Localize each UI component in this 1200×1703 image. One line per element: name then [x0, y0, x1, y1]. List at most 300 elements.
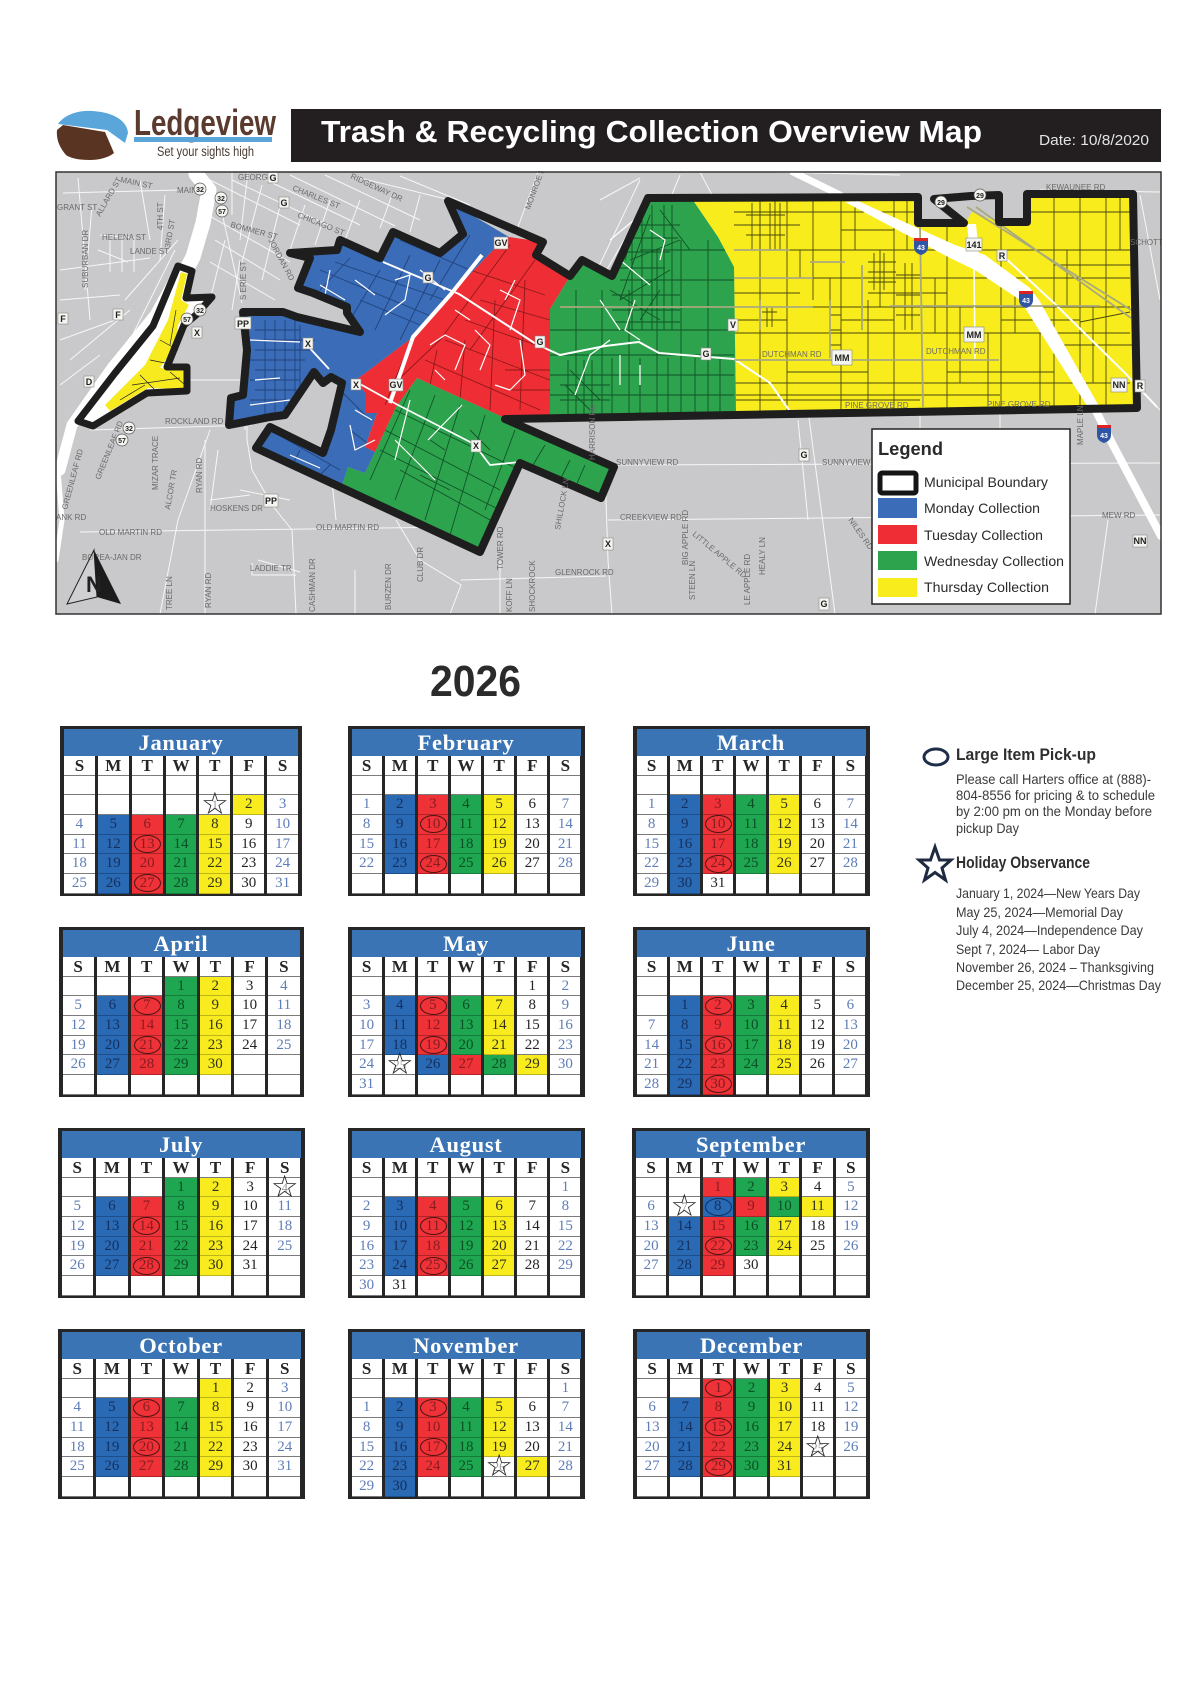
month heading: November	[413, 1333, 519, 1358]
road markers: 57	[118, 438, 126, 445]
day grid: 18	[743, 836, 758, 852]
month heading: December	[700, 1333, 803, 1358]
day grid: 13	[139, 1419, 154, 1435]
day grid: 21	[677, 1238, 692, 1254]
day grid: 2	[212, 978, 219, 994]
legend: Monday: Monday Collection	[924, 500, 1040, 516]
day grid: M	[392, 756, 408, 775]
day grid: 9	[714, 1017, 722, 1033]
day grid: 20	[645, 1439, 660, 1455]
day grid: 10	[743, 1017, 758, 1033]
day grid: 23	[743, 1238, 758, 1254]
day grid: 18	[777, 1037, 792, 1053]
text: holiday list: July 4, 2024—Independence Day	[956, 922, 1143, 938]
day grid: 25	[777, 1056, 792, 1072]
day grid: 19	[843, 1218, 858, 1234]
day grid: 7	[143, 997, 150, 1013]
logo mark: blue sky and brown hill	[57, 111, 128, 160]
day grid: T	[210, 957, 221, 976]
day grid: 28	[677, 1257, 692, 1273]
day grid: 14	[139, 1218, 154, 1234]
day grid: 15	[644, 836, 659, 852]
heading: large item pick-up: Large Item Pick-up	[956, 745, 1096, 764]
day grid: 8	[681, 1017, 688, 1033]
day grid: T	[712, 957, 724, 976]
day grid: 24	[392, 1257, 407, 1273]
day grid: 14	[678, 1419, 693, 1435]
month heading	[352, 930, 580, 957]
day grid: 31	[275, 875, 290, 891]
day grid: 30	[392, 1478, 407, 1494]
heading: holiday observance: Holiday Observance	[956, 854, 1090, 872]
day grid: 20	[810, 836, 825, 852]
day grid: 26	[843, 1238, 858, 1254]
road markers: 43	[1022, 298, 1030, 305]
day grid: 5	[108, 1399, 116, 1415]
day grid: 5	[429, 997, 437, 1013]
day grid: 20	[105, 1037, 120, 1053]
day grid: T	[210, 1359, 221, 1378]
day grid: 1	[212, 1380, 219, 1396]
road markers: 29	[937, 200, 945, 207]
road markers: R	[999, 251, 1006, 261]
day grid: 25	[276, 1037, 291, 1053]
day grid: 22	[644, 855, 659, 871]
day grid: 30	[677, 875, 692, 891]
day grid: 17	[425, 1439, 440, 1455]
road labels: HELENA ST	[102, 233, 146, 242]
road markers: 43	[1100, 433, 1108, 440]
day grid: T	[712, 1158, 723, 1177]
day grid: S	[280, 1359, 289, 1378]
day grid: 9	[396, 816, 403, 832]
text: holiday list: Sept 7, 2024— Labor Day	[956, 941, 1100, 957]
day grid: 24	[743, 1056, 758, 1072]
day grid: 6	[495, 1198, 503, 1214]
day grid: 24	[425, 1458, 440, 1474]
day grid: 20	[104, 1238, 119, 1254]
day grid: 11	[426, 1218, 440, 1234]
text: pick-up instructions	[956, 771, 1155, 836]
day grid: 5	[495, 1399, 503, 1415]
day grid: 25	[425, 1257, 440, 1273]
legend: municipal boundary: Municipal Boundary	[924, 474, 1048, 490]
day grid: 9	[246, 1399, 254, 1415]
day grid: 26	[493, 1459, 506, 1474]
day grid: W	[172, 957, 189, 976]
text: pick-up instructions: by 2:00 pm on the Monday before	[956, 803, 1152, 819]
road labels: CASHMAN DR	[308, 558, 317, 612]
road markers: D	[86, 377, 93, 387]
road labels: OLD MARTIN RD	[316, 523, 379, 532]
road markers: NN	[1112, 380, 1126, 390]
day grid: 30	[208, 1257, 223, 1273]
day grid: 14	[677, 1218, 692, 1234]
day grid: 10	[392, 1218, 407, 1234]
day grid: 25	[72, 875, 87, 891]
roads across zones	[845, 201, 1100, 409]
day grid: 31	[277, 1458, 292, 1474]
road markers: X	[305, 339, 311, 349]
month heading	[352, 1332, 580, 1359]
calendar: September	[632, 1128, 870, 1298]
day grid: 18	[72, 855, 87, 871]
day grid: 13	[843, 1017, 858, 1033]
road labels: LE APPLE RD	[743, 554, 752, 605]
road markers: X	[353, 380, 359, 390]
road labels: SUBURBAN DR	[81, 230, 90, 288]
road labels: PINE GROVE RD	[987, 400, 1051, 409]
day grid: T	[141, 957, 152, 976]
day grid: 29	[207, 875, 222, 891]
road markers: 57	[183, 317, 191, 324]
day grid: T	[713, 1359, 724, 1378]
icon: holiday star	[919, 847, 951, 880]
road labels: GLENROCK RD	[555, 568, 614, 577]
day grid: 17	[275, 836, 290, 852]
day grid: 9	[212, 997, 219, 1013]
day grid: 2	[562, 978, 569, 994]
day grid: S	[362, 957, 371, 976]
day grid: 21	[644, 1056, 659, 1072]
road markers: 32	[196, 187, 204, 194]
road labels: BIG APPLE RD	[681, 510, 690, 565]
day grid: M	[105, 756, 121, 775]
month heading: May	[443, 931, 489, 956]
day grid: S	[73, 1359, 82, 1378]
day grid: F	[527, 1359, 537, 1378]
day grid: 16	[359, 1238, 374, 1254]
day grid: 26	[843, 1439, 858, 1455]
calendar: March	[632, 726, 870, 896]
day grid: 3	[279, 796, 286, 812]
month heading	[352, 1131, 580, 1158]
day grid: T	[210, 1158, 221, 1177]
day grid: 27	[645, 1458, 660, 1474]
road markers: X	[194, 328, 200, 338]
day grid: 22	[677, 1056, 692, 1072]
day grid: 3	[429, 796, 437, 812]
road markers: PP	[237, 319, 249, 329]
road labels: MEW RD	[1102, 511, 1136, 520]
day grid: 11	[392, 1017, 407, 1033]
day grid: 10	[242, 997, 257, 1013]
day grid: 21	[843, 836, 858, 852]
month heading	[636, 930, 866, 957]
day grid: F	[812, 756, 822, 775]
day grid: 9	[562, 997, 569, 1013]
day grid: S	[362, 1359, 371, 1378]
day grid: M	[392, 957, 408, 976]
road labels: MAPLE LN	[1076, 405, 1085, 445]
road markers: G	[800, 450, 808, 460]
day grid: 28	[558, 855, 573, 871]
day grid: 6	[529, 1399, 536, 1415]
day grid: 12	[104, 1419, 119, 1435]
day grid: 30	[359, 1277, 374, 1293]
road labels: 3RD ST	[163, 219, 177, 248]
day grid: S	[280, 1158, 289, 1177]
day grid: 29	[677, 1076, 692, 1092]
day grid: W	[172, 1158, 189, 1177]
day grid: 14	[558, 1419, 573, 1435]
road labels: BURZEN DR	[384, 563, 393, 610]
day grid: 28	[173, 1458, 188, 1474]
day grid: 12	[425, 1017, 440, 1033]
day grid: 17	[359, 1037, 374, 1053]
road markers: G	[536, 337, 544, 347]
road markers: V	[730, 320, 736, 330]
day grid: 24	[425, 855, 440, 871]
day grid: 17	[243, 1218, 258, 1234]
day grid: 30	[241, 875, 256, 891]
day grid: 5	[74, 1198, 81, 1214]
day grid: F	[527, 957, 537, 976]
text: pick-up instructions: pickup Day	[956, 820, 1019, 836]
road labels: ALLARD ST	[94, 176, 124, 218]
day grid: 9	[363, 1218, 370, 1234]
day grid: 23	[208, 1238, 223, 1254]
day grid: 22	[208, 1439, 223, 1455]
day grid: 1	[714, 1179, 721, 1195]
title: Trash & Recycling Collection Overview Map	[321, 114, 982, 149]
day grid: 16	[208, 1218, 223, 1234]
road labels: MAIN ST	[120, 175, 153, 191]
calendar: February	[348, 726, 584, 896]
day grid: 24	[242, 1037, 257, 1053]
day grid: 29	[558, 1257, 573, 1273]
day grid: S	[561, 957, 570, 976]
road markers	[58, 172, 1147, 610]
gray roads in east zones	[560, 207, 1131, 407]
logo tagline: Set your sights high	[157, 144, 254, 159]
day grid: 2	[396, 1399, 403, 1415]
day grid: 15	[173, 1017, 188, 1033]
day grid: 4	[429, 1198, 437, 1214]
day grid: 10	[277, 1399, 292, 1415]
day grid: 7	[648, 1017, 655, 1033]
road labels: CREEKVIEW RD	[620, 513, 682, 522]
day grid: 6	[648, 1399, 656, 1415]
road labels: HARRISON RD	[588, 404, 597, 460]
day grid: W	[742, 957, 759, 976]
day grid: M	[676, 1158, 692, 1177]
road labels: DUTCHMAN RD	[762, 350, 822, 359]
day grid: 7	[681, 1399, 689, 1415]
day grid: 22	[558, 1238, 573, 1254]
road labels: MIZAR TRACE	[151, 436, 160, 490]
day grid: S	[278, 756, 287, 775]
day grid	[636, 1158, 866, 1296]
day grid	[352, 1359, 580, 1497]
day grid: 21	[173, 855, 188, 871]
month heading	[352, 729, 580, 756]
calendar: November	[348, 1329, 584, 1499]
day grid: 8	[715, 1399, 722, 1415]
day grid: 30	[743, 1257, 758, 1273]
day grid	[352, 1158, 580, 1296]
text: holiday list: May 25, 2024—Memorial Day	[956, 904, 1123, 920]
day grid: T	[209, 756, 221, 775]
month heading: March	[717, 730, 785, 755]
road labels: S ERIE ST	[239, 261, 248, 300]
day grid: 9	[747, 1198, 755, 1214]
day grid: 24	[275, 855, 290, 871]
day grid: 15	[359, 1439, 374, 1455]
text: holiday list	[956, 885, 1161, 993]
day grid: S	[561, 756, 570, 775]
day grid: 11	[810, 1198, 825, 1214]
day grid: 16	[677, 836, 692, 852]
day grid: 19	[70, 1238, 85, 1254]
day grid: 29	[173, 1056, 188, 1072]
day grid: 17	[743, 1037, 758, 1053]
day grid: W	[742, 1158, 759, 1177]
day grid: 12	[843, 1399, 858, 1415]
day grid: 9	[748, 1399, 755, 1415]
day grid: F	[527, 756, 537, 775]
day grid: 4	[76, 816, 83, 832]
day grid: 22	[359, 855, 374, 871]
day grid: 19	[71, 1037, 86, 1053]
day grid: T	[778, 756, 790, 775]
day grid: 10	[275, 816, 290, 832]
day grid: 18	[70, 1439, 85, 1455]
day grid: 13	[105, 1017, 120, 1033]
road labels: RYAN RD	[204, 573, 213, 608]
day grid: 20	[492, 1238, 507, 1254]
calendar: August	[348, 1128, 584, 1298]
day grid: 26	[810, 1056, 825, 1072]
road labels: GRANT ST	[57, 203, 97, 212]
day grid: 6	[647, 1198, 655, 1214]
day grid: 25	[810, 1238, 825, 1254]
road labels: DUTCHMAN RD	[926, 347, 986, 356]
month heading: February	[418, 730, 514, 755]
road labels: KOFF LN	[505, 578, 514, 612]
day grid: 4	[747, 796, 755, 812]
day grid: 20	[525, 1439, 540, 1455]
day grid: T	[427, 756, 439, 775]
parcel lines: yellow zone	[734, 194, 1133, 414]
road labels: SHOCKROCK	[528, 560, 537, 612]
day grid: 2	[714, 997, 722, 1013]
day grid: 10	[425, 1419, 440, 1435]
day grid: 16	[392, 836, 407, 852]
day grid: 17	[777, 1419, 792, 1435]
day grid: 15	[359, 836, 374, 852]
day grid: 18	[810, 1419, 825, 1435]
day grid: 31	[710, 875, 725, 891]
day grid: 11	[811, 1399, 825, 1415]
day grid: 1	[212, 797, 218, 812]
day grid: 12	[810, 1017, 825, 1033]
legend heading: Legend	[878, 439, 943, 459]
day grid: 28	[644, 1076, 659, 1092]
day grid: 24	[710, 855, 725, 871]
road labels: TREE LN	[165, 576, 174, 610]
day grid: 24	[243, 1238, 258, 1254]
day grid: 3	[246, 978, 253, 994]
day grid: T	[141, 756, 153, 775]
day grid: 30	[243, 1458, 258, 1474]
day grid: 21	[558, 836, 573, 852]
day grid	[63, 957, 300, 1095]
logo: Ledgeview	[56, 106, 277, 160]
day grid: 14	[843, 816, 858, 832]
road markers: G	[424, 273, 432, 283]
text: pick-up instructions: Please call Harters office at (888)-	[956, 771, 1151, 787]
day grid: 10	[777, 1198, 792, 1214]
day grid: 21	[558, 1439, 573, 1455]
icon: large item ellipse	[924, 749, 948, 765]
road markers: G	[820, 599, 828, 609]
road labels: PINE GROVE RD	[845, 401, 909, 410]
road labels: KEWAUNEE RD	[1046, 183, 1105, 192]
day grid: 5	[74, 997, 82, 1013]
day grid: 23	[677, 855, 692, 871]
day grid: 3	[429, 1399, 437, 1415]
day grid: 14	[173, 836, 188, 852]
day grid: 22	[525, 1037, 540, 1053]
month heading: October	[139, 1333, 223, 1358]
day grid: 3	[781, 1380, 788, 1396]
day grid: 1	[681, 997, 688, 1013]
road labels: GREENLEAF RD	[94, 419, 125, 481]
day grid: S	[362, 1158, 371, 1177]
month heading	[636, 729, 866, 756]
day grid: 20	[525, 836, 540, 852]
west enclave boundary outline	[78, 266, 212, 426]
calendar: May	[348, 927, 584, 1097]
day grid: 5	[814, 997, 821, 1013]
day grid: 10	[777, 1399, 792, 1415]
day grid: 18	[276, 1017, 291, 1033]
road labels: TOWER RD	[496, 526, 505, 570]
day grid: 15	[710, 1218, 725, 1234]
legend	[872, 429, 1070, 604]
day grid: 27	[644, 1257, 659, 1273]
day grid: 3	[781, 1179, 788, 1195]
title banner	[291, 109, 1161, 162]
day grid: 23	[392, 855, 407, 871]
legend: Thursday	[878, 578, 1049, 597]
day grid: W	[742, 756, 759, 775]
day grid: 24	[359, 1056, 374, 1072]
road markers: G	[280, 198, 288, 208]
day grid: 5	[847, 1380, 855, 1396]
day grid: 21	[678, 1439, 693, 1455]
zone: Wednesday green (north)	[550, 196, 736, 416]
road labels: BOMMER ST	[229, 220, 279, 241]
road markers: X	[473, 441, 479, 451]
calendar: April	[58, 927, 304, 1097]
day grid: 31	[392, 1277, 407, 1293]
day grid: 17	[277, 1419, 292, 1435]
day grid: 4	[462, 796, 470, 812]
day grid: 7	[562, 1399, 569, 1415]
day grid: 16	[243, 1419, 258, 1435]
day grid: 4	[396, 997, 403, 1013]
day grid: 14	[173, 1419, 188, 1435]
day grid: 23	[558, 1037, 573, 1053]
day grid: 6	[108, 1198, 116, 1214]
zone: Thursday yellow	[690, 192, 1140, 414]
day grid: T	[712, 756, 724, 775]
day grid: 3	[396, 1198, 403, 1214]
day grid: 2	[245, 796, 252, 812]
month heading: January	[139, 730, 223, 755]
